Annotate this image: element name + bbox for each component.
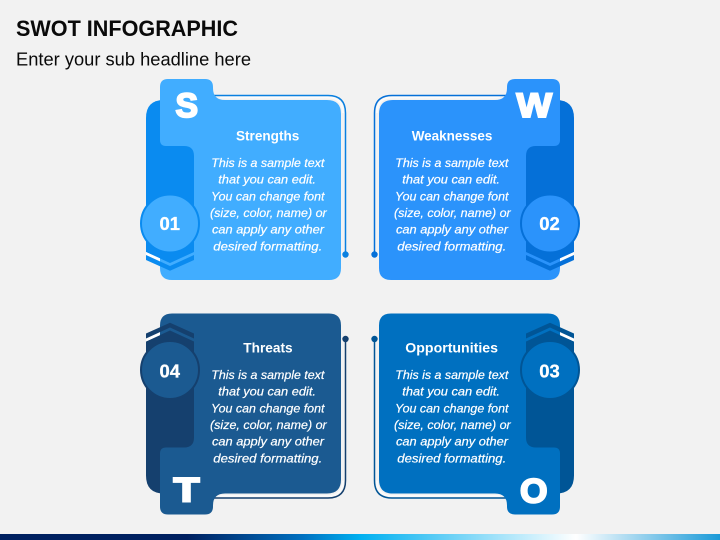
text block: weaknesses: You can change font xyxy=(395,190,509,203)
text block: strengths: that you can edit. xyxy=(218,174,316,187)
text block: strengths: You can change font xyxy=(211,190,325,203)
letter T: T xyxy=(174,472,200,510)
heading: weaknesses: Weaknesses xyxy=(412,129,492,144)
letter S: S xyxy=(176,87,198,125)
text block: threats: desired formatting. xyxy=(213,452,322,465)
text block: opportunities: desired formatting. xyxy=(397,452,506,465)
panel: threats xyxy=(141,314,349,514)
text block: opportunities: can apply any other xyxy=(396,436,509,449)
number 03: 03 xyxy=(539,362,560,382)
card shape: weaknesses xyxy=(371,79,579,280)
text block: opportunities xyxy=(394,369,512,465)
panel: opportunities xyxy=(371,314,579,514)
text block: weaknesses xyxy=(394,157,512,253)
number 01: 01 xyxy=(160,214,180,234)
heading: threats: Threats xyxy=(243,341,293,356)
panel: weaknesses xyxy=(371,79,579,280)
text block: threats: can apply any other xyxy=(212,436,325,449)
text block: threats: You can change font xyxy=(211,402,325,415)
text block: opportunities: that you can edit. xyxy=(402,386,500,399)
subtitle: Enter your sub headline here xyxy=(16,50,251,70)
text block: strengths: (size, color, name) or xyxy=(210,207,328,220)
number 02: 02 xyxy=(539,214,560,234)
text block: strengths: This is a sample text xyxy=(211,157,325,170)
text block: strengths: can apply any other xyxy=(212,224,325,237)
card shape: opportunities xyxy=(371,314,579,514)
heading: opportunities: Opportunities xyxy=(405,341,498,356)
panel: strengths xyxy=(141,79,349,280)
letter W: W xyxy=(516,87,552,125)
text block: weaknesses: can apply any other xyxy=(396,224,509,237)
card shape: threats xyxy=(141,314,349,514)
text block: opportunities: (size, color, name) or xyxy=(394,419,512,432)
title: SWOT INFOGRAPHIC xyxy=(16,16,238,41)
heading: strengths: Strengths xyxy=(236,129,299,144)
text block: threats: This is a sample text xyxy=(211,369,325,382)
text block: weaknesses: This is a sample text xyxy=(395,157,509,170)
text block: strengths: desired formatting. xyxy=(213,240,322,253)
text block: opportunities: This is a sample text xyxy=(395,369,509,382)
text block: strengths xyxy=(210,157,328,253)
footer gradient bar xyxy=(0,534,720,540)
letter O: O xyxy=(520,472,548,510)
text block: threats xyxy=(210,369,328,465)
text block: opportunities: You can change font xyxy=(395,402,509,415)
text block: weaknesses: that you can edit. xyxy=(402,174,500,187)
text block: threats: that you can edit. xyxy=(218,386,316,399)
card shape: strengths xyxy=(141,79,349,280)
text block: weaknesses: desired formatting. xyxy=(397,240,506,253)
text block: threats: (size, color, name) or xyxy=(210,419,328,432)
number 04: 04 xyxy=(160,362,180,382)
text block: weaknesses: (size, color, name) or xyxy=(394,207,512,220)
